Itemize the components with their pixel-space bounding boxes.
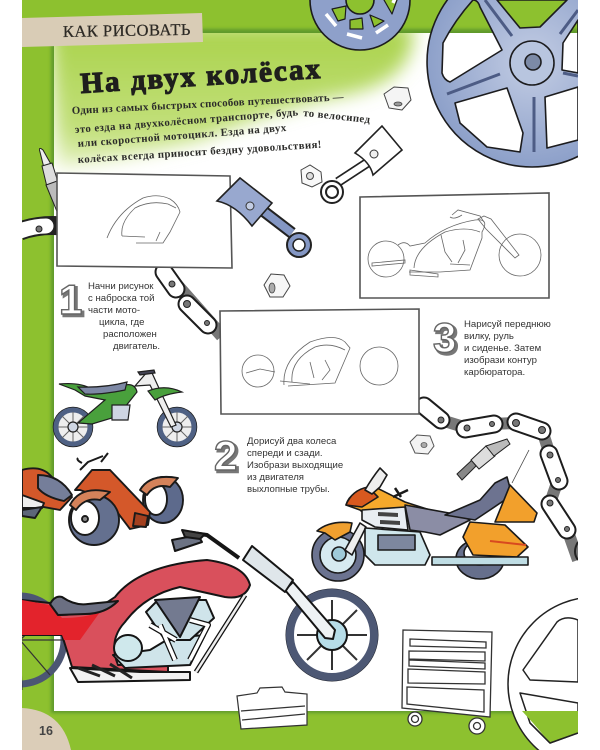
- small nut: near intro: [301, 165, 322, 187]
- text: step 2: из двигателя: [247, 472, 304, 483]
- nut: centre: [264, 274, 290, 297]
- motorcycle: green dirt bike: [54, 370, 196, 446]
- text: step 3: и сиденье. Затем: [464, 343, 541, 354]
- text: step 1: Начни рисунок: [88, 281, 154, 292]
- nut: lower centre: [410, 435, 434, 454]
- intro text: то велосипед: [303, 107, 371, 126]
- intro text: колёсах всегда приносит бездну удовольствия!: [77, 139, 322, 166]
- text: step 3: изобрази контур: [464, 355, 537, 366]
- motorcycle: orange trike: [22, 453, 183, 545]
- numeral 3: 3: [433, 314, 456, 361]
- title: На двух колёсах: [79, 53, 321, 100]
- motorcycle: red chopper: [0, 530, 378, 690]
- piston: blue connecting rod: [217, 178, 311, 257]
- panel: step 1 drawing: [57, 173, 232, 268]
- panel: step 2 drawing: [220, 309, 419, 414]
- intro text: Один из самых быстрых способов путешествовать —: [72, 91, 344, 117]
- wheel: top right spoked wheel: [426, 0, 578, 168]
- spark plug: left: [39, 148, 56, 212]
- text: step 3: Нарисуй переднюю: [464, 319, 551, 330]
- chain: between panels 1 and 2: [160, 266, 222, 336]
- text: step 2: спереди и сзади.: [247, 448, 323, 459]
- numeral 1: 1: [61, 278, 84, 325]
- tool chest: [402, 630, 492, 734]
- label tab: how to draw: КАК РИСОВАТЬ: [63, 20, 191, 41]
- text: step 3: вилку, руль: [464, 331, 514, 342]
- text: step 1: расположен: [103, 329, 157, 340]
- spark plug: right: [457, 439, 529, 483]
- sprocket: top centre gear: [310, 0, 410, 50]
- text: step 3: [464, 319, 551, 378]
- numeral 2: 2: [216, 434, 239, 481]
- label tab: how to draw: [22, 13, 203, 47]
- chain: right side running down the page: [418, 402, 578, 560]
- intro text: [72, 96, 370, 163]
- page number badge: [22, 708, 71, 750]
- numeral 3: 3: [435, 316, 458, 363]
- numeral 1: [60, 284, 84, 318]
- motorcycle: orange touring bike: [312, 468, 537, 581]
- intro text: это езда на двухколёсном транспорте, будь: [74, 106, 299, 136]
- text: step 1: двигатель.: [113, 341, 160, 352]
- chain: left of first panel: [20, 226, 62, 232]
- green title glow: [50, 25, 413, 168]
- intro text: или скоростной мотоцикл. Езда на двух: [77, 122, 287, 150]
- toolbox: [237, 687, 307, 729]
- page number badge: 16: [39, 724, 53, 738]
- wheel: bottom right outline: [507, 598, 578, 750]
- numeral 1: 1: [59, 276, 82, 323]
- text: step 1: [88, 281, 160, 352]
- nut: right of intro: [384, 87, 411, 110]
- text: step 1: с наброска той: [88, 293, 154, 304]
- text: step 1: части мото-: [88, 305, 140, 316]
- numeral 2: 2: [214, 432, 237, 479]
- text: step 2: [247, 436, 343, 495]
- text: step 1: цикла, где: [99, 317, 144, 328]
- text: step 2: Изобрази выходящие: [247, 460, 343, 471]
- text: step 3: карбюратора.: [464, 367, 525, 378]
- numeral 3: [433, 322, 458, 356]
- text: step 2: Дорисуй два колеса: [247, 436, 337, 447]
- numeral 2: [214, 440, 239, 474]
- piston: outline near intro: [321, 126, 402, 203]
- panel: step 3 drawing: [360, 193, 549, 298]
- text: step 2: выхлопные трубы.: [247, 484, 330, 495]
